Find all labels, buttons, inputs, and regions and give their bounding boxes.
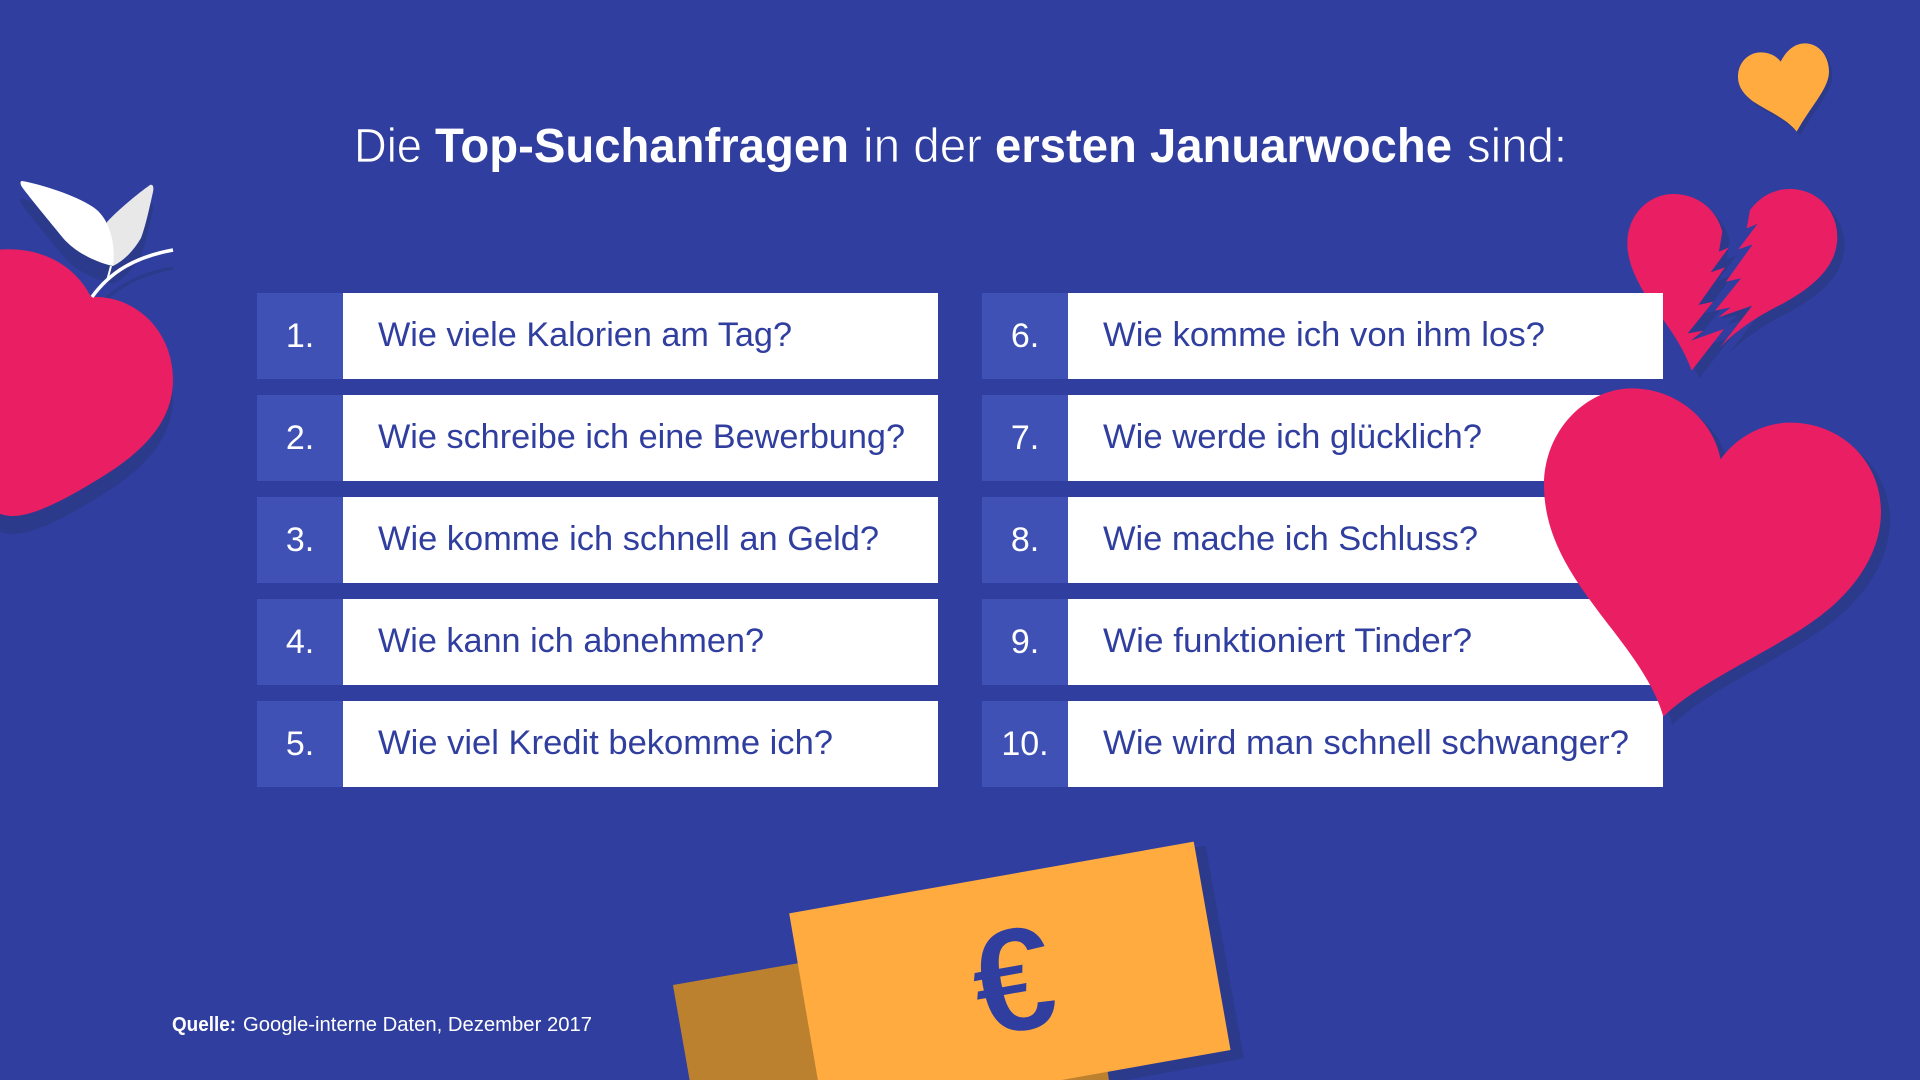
- list: right column: [982, 293, 1663, 787]
- row 3: [257, 497, 938, 583]
- row 7: 7.: [1011, 419, 1039, 457]
- row 5: [257, 701, 938, 787]
- source note: Quelle:: [172, 1014, 236, 1036]
- row 3: Wie komme ich schnell an Geld?: [378, 520, 879, 558]
- row 7: [982, 395, 1663, 481]
- title: in der: [863, 120, 982, 173]
- row 5: Wie viel Kredit bekomme ich?: [378, 724, 833, 762]
- title: ersten Januarwoche: [995, 120, 1452, 173]
- row 10: 10.: [1001, 725, 1049, 763]
- row 6: 6.: [1011, 317, 1039, 355]
- row 1: 1.: [286, 317, 314, 355]
- row 1: Wie viele Kalorien am Tag?: [378, 316, 792, 354]
- title: Die: [354, 120, 422, 173]
- row 4: [257, 599, 938, 685]
- row 9: 9.: [1011, 623, 1039, 661]
- row 2: [257, 395, 938, 481]
- row 6: [982, 293, 1663, 379]
- row 8: 8.: [1011, 521, 1039, 559]
- row 7: Wie werde ich glücklich?: [1103, 418, 1482, 456]
- icon: broken heart: [1627, 189, 1845, 379]
- title: Top-Suchanfragen: [435, 120, 849, 173]
- icon: orange heart: [1738, 43, 1832, 136]
- row 8: Wie mache ich Schluss?: [1103, 520, 1478, 558]
- icon: heart with leaves: [0, 181, 173, 534]
- row 2: 2.: [286, 419, 314, 457]
- icon: euro banknotes: [673, 842, 1244, 1080]
- icon: large heart: [1544, 388, 1890, 725]
- icon: euro banknotes: €: [958, 890, 1069, 1070]
- title: [354, 120, 1567, 173]
- row 4: 4.: [286, 623, 314, 661]
- source note: Google-interne Daten, Dezember 2017: [243, 1014, 592, 1036]
- row 9: Wie funktioniert Tinder?: [1103, 622, 1472, 660]
- title: sind:: [1467, 120, 1567, 173]
- row 8: [982, 497, 1663, 583]
- row 3: 3.: [286, 521, 314, 559]
- row 6: Wie komme ich von ihm los?: [1103, 316, 1545, 354]
- row 9: [982, 599, 1663, 685]
- row 5: 5.: [286, 725, 314, 763]
- row 1: [257, 293, 938, 379]
- row 10: Wie wird man schnell schwanger?: [1103, 724, 1629, 762]
- row 10: [982, 701, 1663, 787]
- row 4: Wie kann ich abnehmen?: [378, 622, 764, 660]
- list: left column: [257, 293, 938, 787]
- row 2: Wie schreibe ich eine Bewerbung?: [378, 418, 905, 456]
